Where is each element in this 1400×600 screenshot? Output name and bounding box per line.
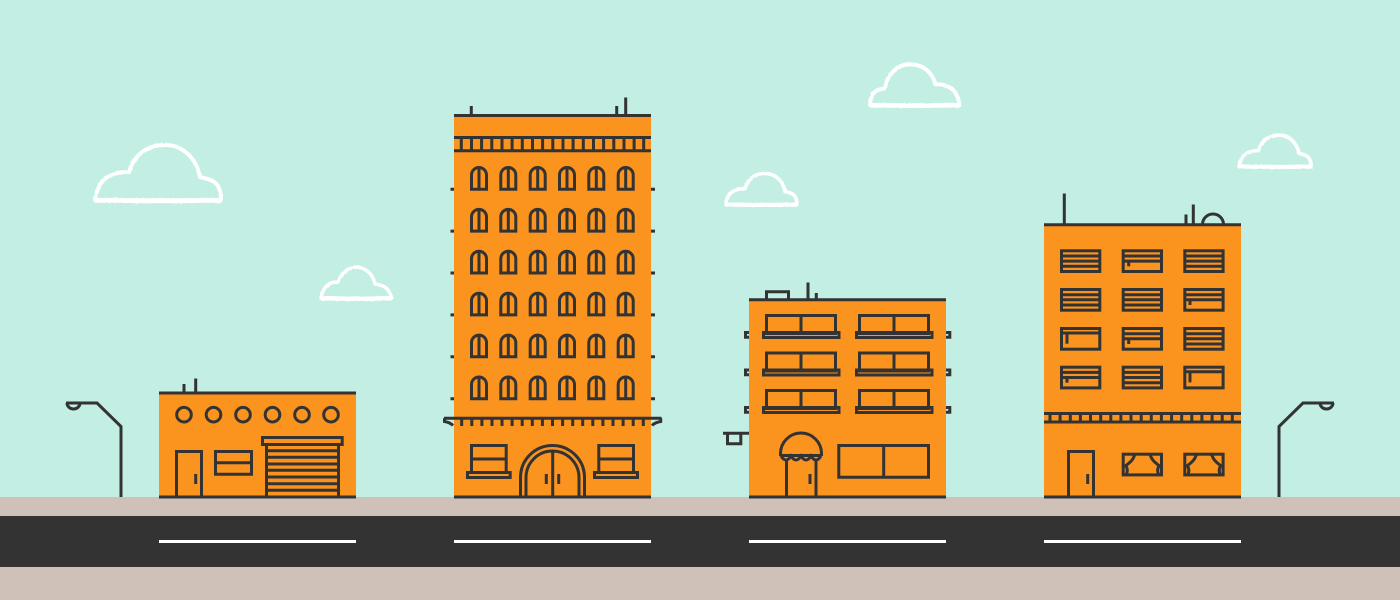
arched double door: [520, 446, 584, 497]
cloud: large left: [95, 145, 221, 201]
shuttered windows: [1062, 251, 1223, 388]
roof line and antennas: [454, 98, 651, 116]
door: [786, 460, 816, 497]
building 4: shuttered block: [1044, 194, 1241, 497]
curtained windows: [1123, 454, 1223, 475]
building 3: apartments: [723, 282, 950, 497]
roof line, vent and antennas: [749, 282, 946, 300]
upper cornice: [454, 138, 651, 151]
right street lamp: [1279, 403, 1334, 497]
wall: [749, 300, 946, 497]
round windows: [177, 407, 338, 422]
ground line: [1044, 496, 1241, 498]
garage door: [262, 438, 342, 497]
cloud: centre: [726, 173, 797, 205]
ground line: [159, 496, 356, 498]
road: [0, 516, 1400, 567]
ground line: [749, 496, 946, 498]
right ground window: [594, 446, 638, 478]
balcony windows: [764, 316, 932, 412]
building 2: tower: [444, 98, 662, 497]
cornice band: [1044, 414, 1241, 422]
side ticks: [450, 189, 655, 399]
door: [176, 452, 202, 497]
left street lamp: [66, 403, 121, 497]
left ground window: [468, 446, 510, 478]
wall: [454, 116, 651, 497]
clouds: [95, 64, 1311, 299]
ground line: [454, 496, 651, 498]
cloud: small left: [321, 267, 392, 299]
side brackets: [746, 332, 950, 412]
sidewalk: [0, 497, 1400, 600]
lower cornice: [444, 418, 662, 426]
roof line and antennas: [159, 378, 356, 393]
wall: [159, 393, 356, 497]
cloud: right: [1239, 135, 1311, 167]
arched windows: [472, 168, 633, 399]
shop window: [839, 446, 928, 477]
lane markings: [159, 540, 1241, 543]
building 1: garage: [159, 378, 356, 497]
roof line, antennas and dish: [1044, 194, 1241, 225]
cloud: top centre: [870, 64, 960, 106]
awning: [780, 433, 822, 460]
hanging sign: [723, 433, 749, 444]
wall: [1044, 225, 1241, 497]
door: [1068, 452, 1094, 497]
window: [216, 452, 252, 474]
